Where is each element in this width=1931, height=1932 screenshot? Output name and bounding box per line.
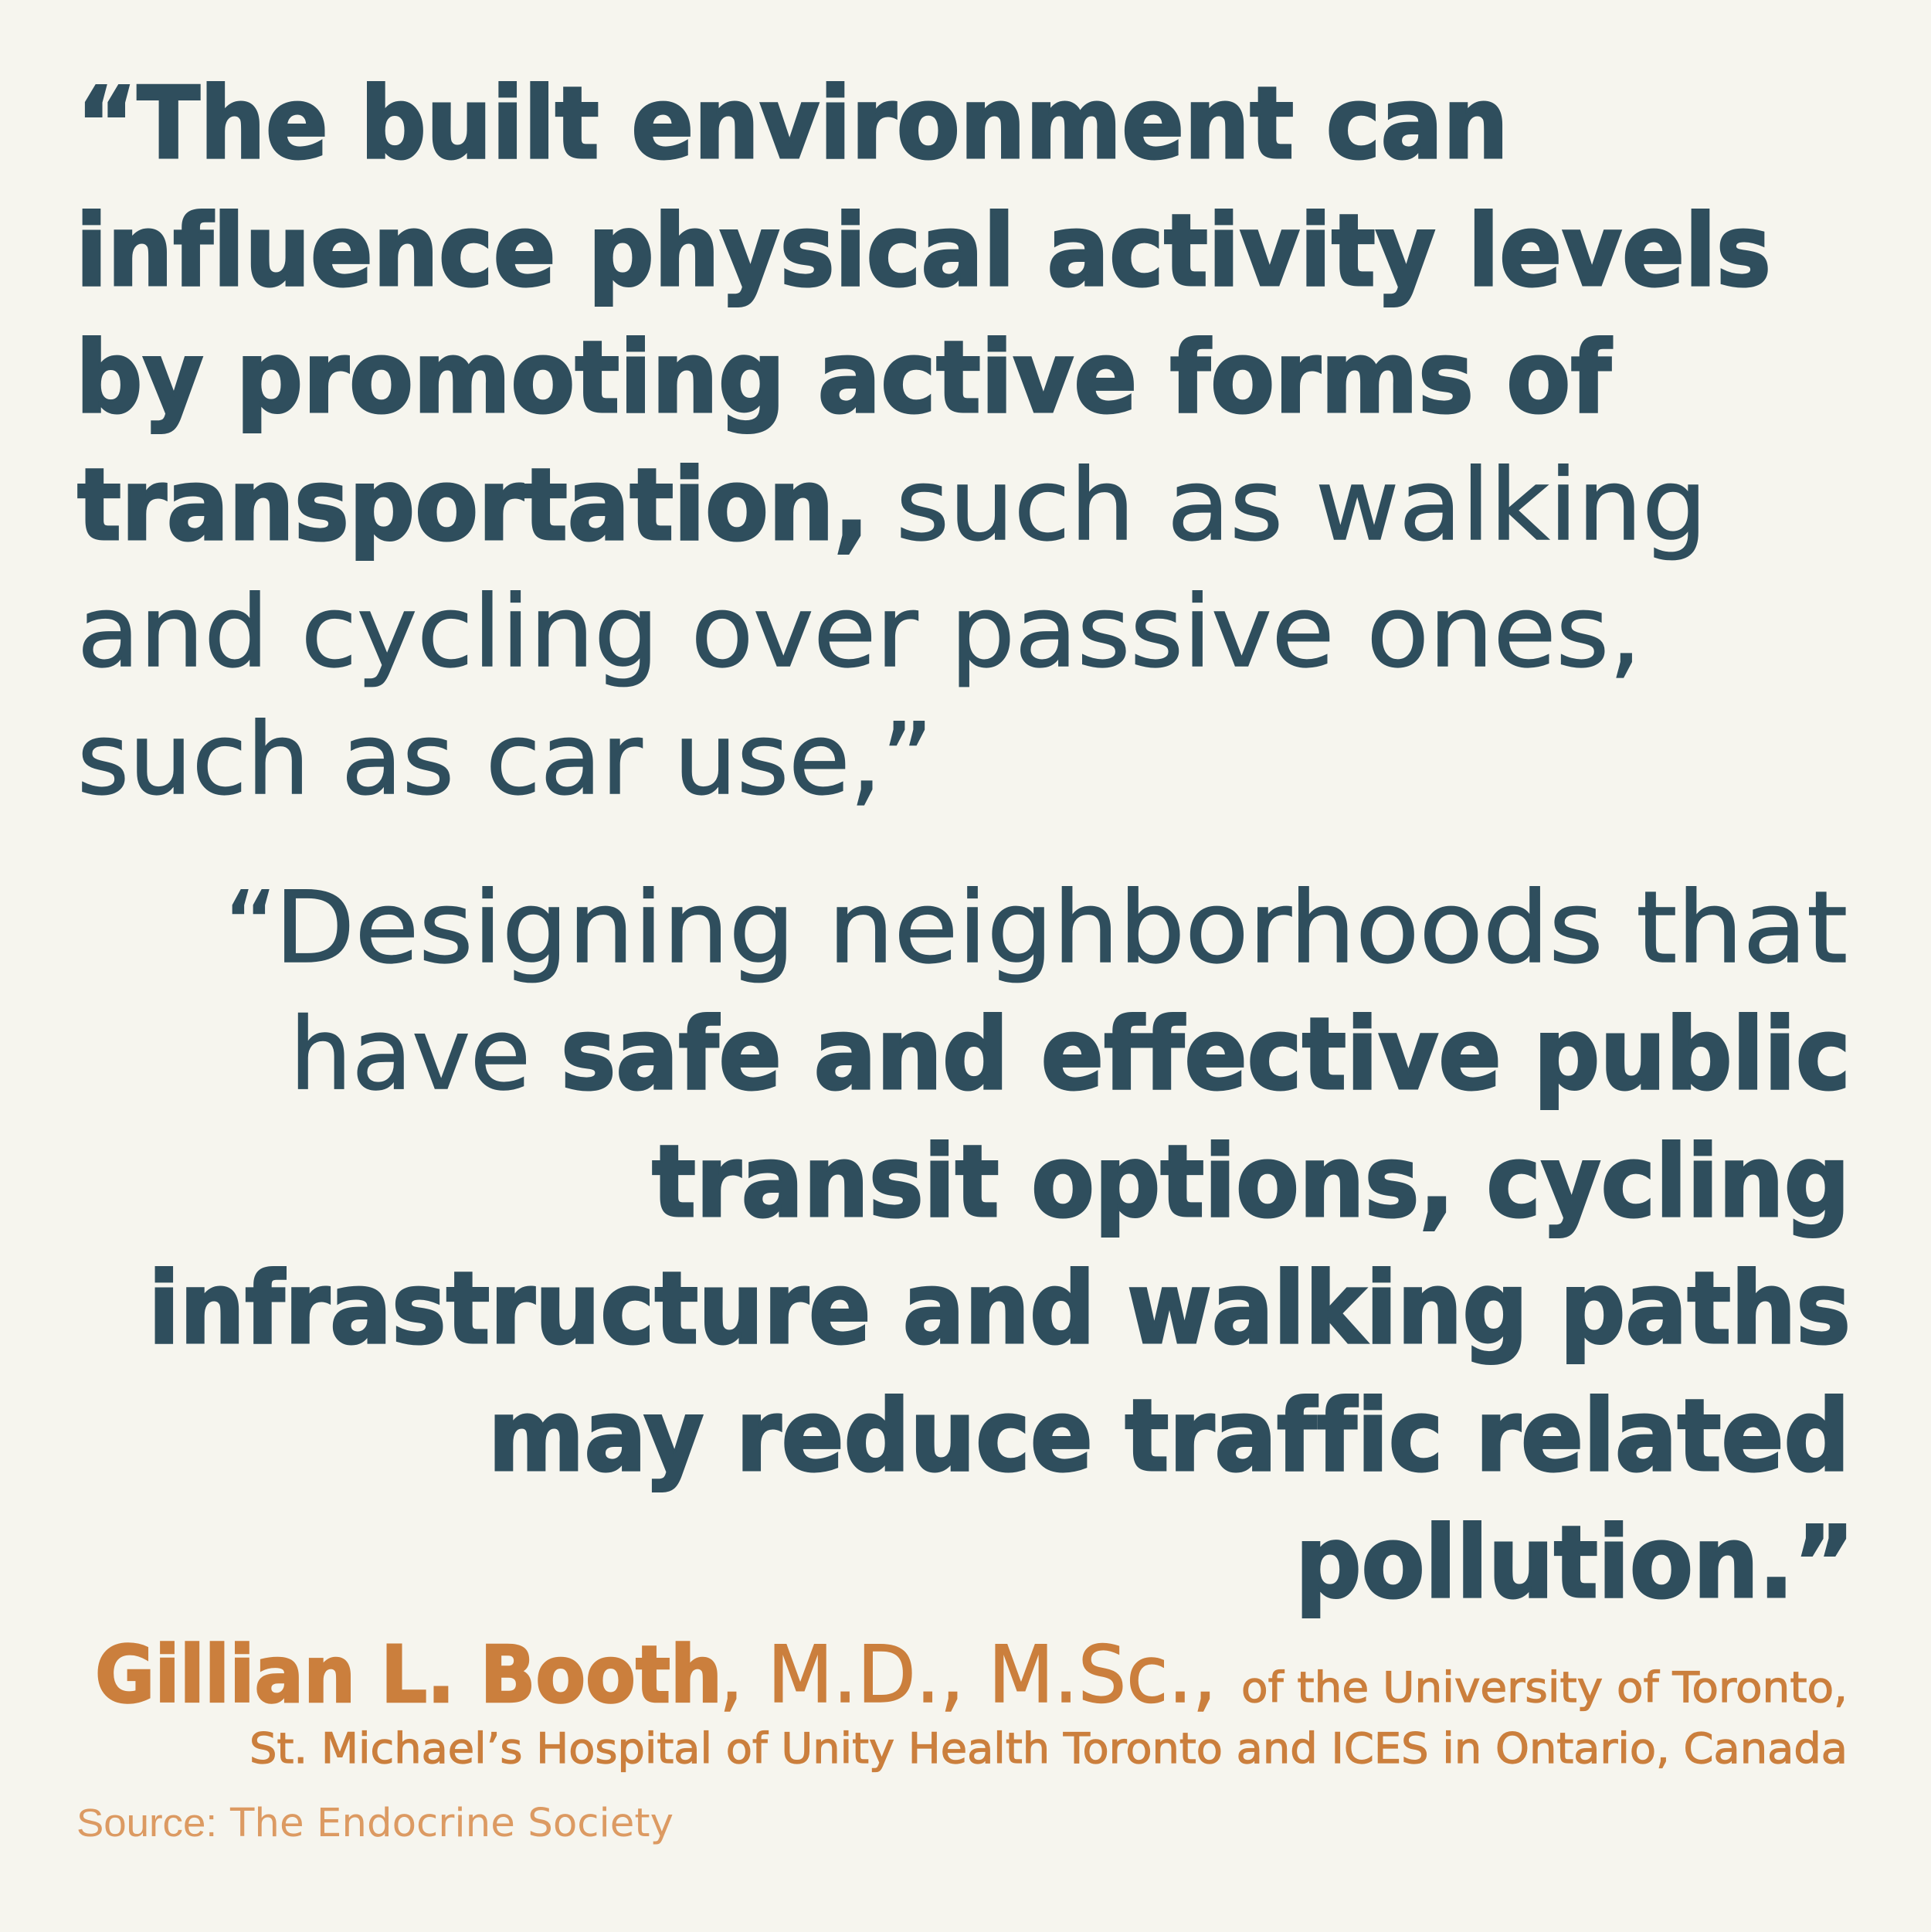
attribution — [95, 1629, 1848, 1773]
quote 1 line 5: and cycling over passive ones, — [77, 575, 1641, 690]
quote 1 line 4 regular part: such as walking — [896, 448, 1707, 563]
quote 1 line 1: “The built environment can — [76, 66, 1508, 182]
quote 2 line 2 regular part: have — [290, 997, 531, 1112]
quote 1 line 3: by promoting active forms of — [76, 321, 1612, 436]
quote 2 line 6: pollution.” — [1295, 1506, 1855, 1621]
text block: first quote — [76, 66, 1771, 817]
source name: The Endocrine Society — [229, 1801, 674, 1846]
text block: second quote — [148, 871, 1855, 1621]
source credit — [76, 1801, 674, 1846]
quote 1 line 4 bold part: transportation, — [77, 448, 869, 563]
affiliation line 1: of the University of Toronto, — [1241, 1663, 1848, 1712]
author degrees: , M.D., M.Sc., — [719, 1629, 1217, 1721]
quote 2 line 1: “Designing neighborhoods that — [224, 871, 1848, 986]
affiliation line 2: St. Michael’s Hospital of Unity Health Toronto and ICES in Ontario, Canada — [249, 1724, 1848, 1773]
quote 2 line 2 bold part: safe and effective public — [561, 997, 1851, 1112]
quote 1 line 6: such as car use,” — [77, 702, 933, 817]
author name: Gillian L. Booth — [95, 1629, 722, 1721]
source label: Source: — [76, 1801, 217, 1845]
quote 1 line 2: influence physical activity levels — [76, 194, 1771, 309]
quote 2 line 5: may reduce traffic related — [488, 1379, 1850, 1494]
quote 2 line 3: transit options, cycling — [652, 1125, 1850, 1240]
